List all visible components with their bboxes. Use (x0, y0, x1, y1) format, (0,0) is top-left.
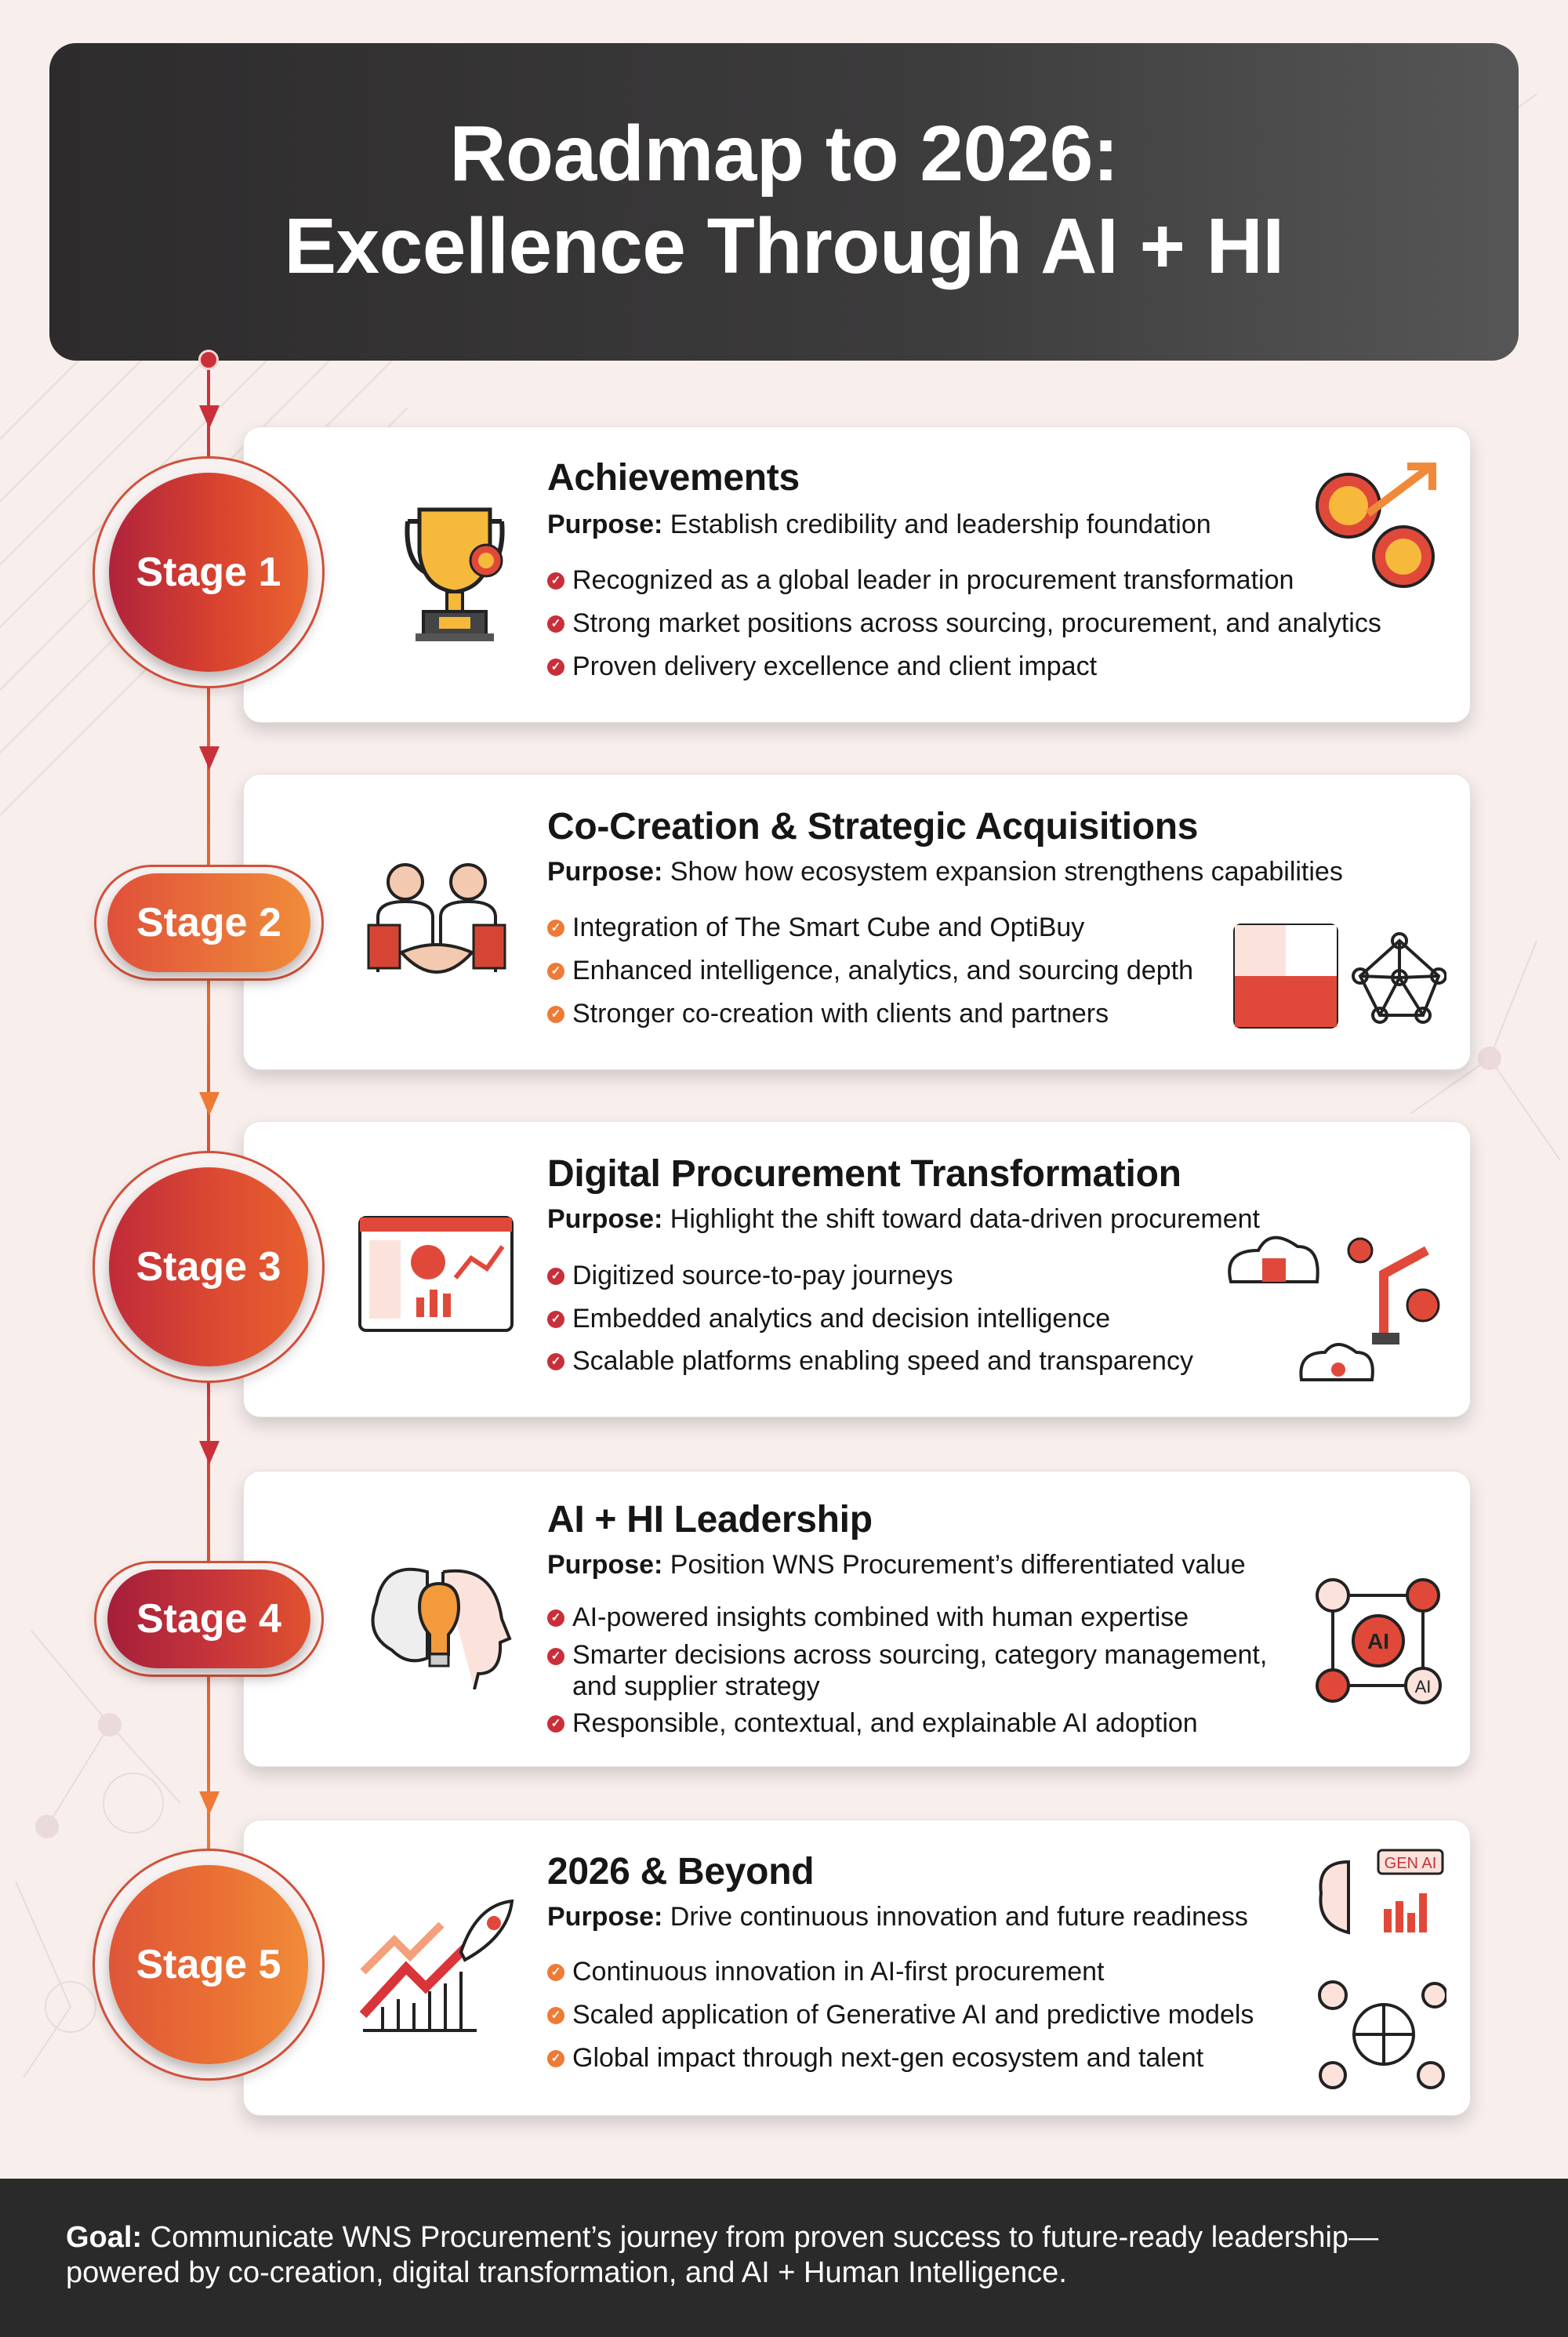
text: AI + HI Leadership (547, 1499, 873, 1540)
arrows (93, 405, 1445, 2081)
stage 3 badge (89, 1151, 328, 1391)
text: Responsible, contextual, and explainable AI adoption (572, 1708, 1198, 1738)
text: stage 2 (547, 806, 1343, 1029)
text: Digital Procurement Transformation (547, 1153, 1181, 1195)
icon: gen AI and globe (1318, 1849, 1446, 2089)
text: Enhanced intelligence, analytics, and sourcing depth (572, 956, 1193, 985)
icon: AI network: AI (1415, 1677, 1431, 1697)
text: stage 3 (547, 1153, 1260, 1376)
text: 2026 & Beyond (547, 1851, 814, 1892)
text: Global impact through next-gen ecosystem and talent (572, 2043, 1203, 2073)
footer: goal (0, 2179, 1568, 2337)
text: Purpose: Establish credibility and leadership foundation (547, 510, 1211, 539)
footer: goal: Goal: Communicate WNS Procurement’s journey from proven success to future-ready leadership— (66, 2221, 1378, 2254)
text: Stronger co-creation with clients and partners (572, 999, 1109, 1029)
text: stage 4 (547, 1499, 1267, 1738)
icon: puzzle and network (1233, 924, 1446, 1029)
text: Embedded analytics and decision intelligence (572, 1304, 1110, 1334)
icon: AI network: AI (1367, 1629, 1389, 1653)
text: Recognized as a global leader in procurement transformation (572, 565, 1294, 595)
text: Smarter decisions across sourcing, category management, (572, 1640, 1267, 1670)
icon: handshake (367, 863, 506, 974)
title (284, 110, 1284, 290)
panel: stage 1 card (243, 426, 1471, 723)
title: Roadmap to 2026: (449, 110, 1119, 198)
panel: stage 2 card (243, 774, 1471, 1070)
text: stage 5 (547, 1851, 1254, 2073)
stage 1 badge: Stage 1 (136, 550, 281, 595)
panel: stage 3 card (243, 1121, 1471, 1417)
icon: award badges (1316, 463, 1436, 588)
text: Achievements (547, 457, 800, 499)
timeline line (207, 361, 210, 1858)
stage 5 badge: Stage 5 (136, 1942, 281, 1987)
icon: trophy (405, 508, 505, 641)
text: Purpose: Highlight the shift toward data-driven procurement (547, 1204, 1260, 1234)
stage 3 badge: Stage 3 (136, 1244, 281, 1290)
text: Purpose: Drive continuous innovation and future readiness (547, 1902, 1248, 1932)
text: Integration of The Smart Cube and OptiBuy (572, 913, 1084, 942)
panel: stage 5 card (243, 1820, 1471, 2116)
stage 2 badge: Stage 2 (136, 900, 281, 945)
text: Purpose: Position WNS Procurement’s differentiated value (547, 1550, 1246, 1580)
icon: dashboard (358, 1216, 514, 1332)
header panel (49, 43, 1519, 361)
title: Excellence Through AI + HI (284, 202, 1284, 290)
stage 1 badge (89, 456, 328, 696)
footer: goal: powered by co-creation, digital transformation, and AI + Human Intelligence. (66, 2256, 1067, 2289)
stage 5 badge (89, 1849, 328, 2088)
text: Scalable platforms enabling speed and transparency (572, 1346, 1193, 1376)
text: AI-powered insights combined with human expertise (572, 1602, 1189, 1632)
icon: brain lightbulb head (371, 1568, 511, 1689)
text: Strong market positions across sourcing, procurement, and analytics (572, 608, 1381, 638)
text: Co-Creation & Strategic Acquisitions (547, 806, 1198, 847)
icon: growth rocket (359, 1899, 514, 2032)
panel: stage 4 card (243, 1471, 1471, 1767)
icon: AI network (1316, 1578, 1442, 1704)
stage 2 badge (91, 865, 326, 989)
text: stage 1 (547, 457, 1381, 681)
stage 4 badge (91, 1561, 326, 1686)
stage 4 badge: Stage 4 (136, 1596, 281, 1642)
text: Purpose: Show how ecosystem expansion strengthens capabilities (547, 857, 1343, 887)
timeline start dot (198, 350, 219, 370)
icon: cloud and robot arm (1228, 1236, 1439, 1381)
text: Proven delivery excellence and client impact (572, 651, 1097, 681)
text: Digitized source-to-pay journeys (572, 1261, 953, 1290)
text: and supplier strategy (572, 1671, 820, 1701)
text: Continuous innovation in AI-first procurement (572, 1957, 1104, 1987)
text: Scaled application of Generative AI and predictive models (572, 2000, 1254, 2030)
icon: gen AI and globe: GEN AI (1385, 1855, 1436, 1872)
